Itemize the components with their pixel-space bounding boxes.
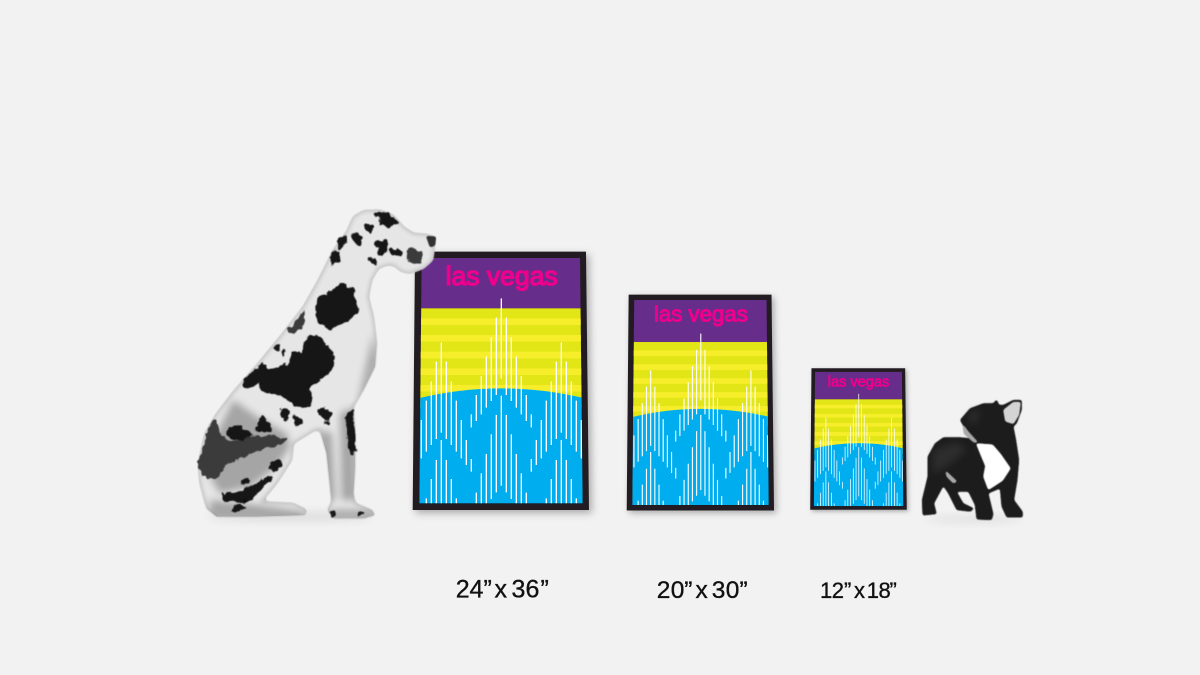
french bulldog [922,399,1023,522]
poster title: medium: las vegas [654,302,748,327]
dog black spots [220,212,403,517]
poster: 24x36 large [413,252,589,510]
poster title: small: las vegas [828,375,889,391]
size label: 12x18: 12”x18” [820,578,897,603]
bulldog inner ear [1003,402,1021,424]
great dane dog [198,210,436,521]
poster: 12x18 small [810,368,907,510]
poster: 20x30 medium [627,295,774,511]
dog body silhouette [198,210,436,518]
poster title: large: las vegas [446,261,558,291]
dog body shading [210,333,377,518]
bulldog silhouette [922,399,1023,520]
dog grey flank and shoulder patches [198,247,422,478]
size label: 24x36: 24”x36” [456,576,549,604]
size label: 20x30: 20”x30” [657,577,748,604]
dog nose [426,236,436,247]
bulldog muzzle highlight [945,423,978,483]
bulldog white chest [976,443,1011,490]
bulldog body highlight [932,408,980,473]
